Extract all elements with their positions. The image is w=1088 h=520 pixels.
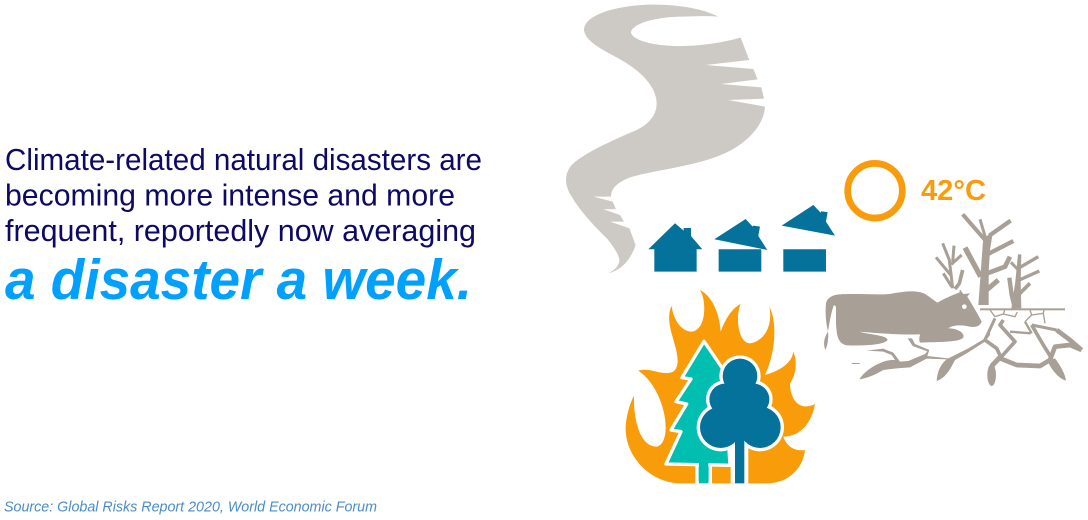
intro text: frequent, reportedly now averaging xyxy=(5,214,476,248)
intro text: Climate-related natural disasters are xyxy=(5,143,482,177)
house: intact xyxy=(648,223,702,272)
intro text: becoming more intense and more xyxy=(5,178,455,212)
house: roof blown off xyxy=(782,205,835,272)
intro text xyxy=(5,143,482,248)
icon: drought scene xyxy=(824,214,1082,386)
cracked ground: right xyxy=(980,308,1082,386)
temperature label: 42°C xyxy=(921,175,986,207)
icon: houses being torn apart xyxy=(648,205,835,272)
dead trees xyxy=(936,214,1039,308)
emphasis text: a disaster a week. xyxy=(5,248,472,312)
icon: tornado xyxy=(566,5,765,273)
text block: headline xyxy=(5,143,482,312)
icon: burning forest xyxy=(626,290,815,483)
cracked ground: left xyxy=(852,327,990,381)
cow xyxy=(824,289,982,350)
source note: Source: Global Risks Report 2020, World Economic Forum xyxy=(4,500,377,516)
flames xyxy=(626,290,815,483)
conifer tree xyxy=(666,341,730,483)
broadleaf tree xyxy=(697,355,784,483)
house: roof lifting xyxy=(714,219,767,272)
icon: sun xyxy=(848,163,902,218)
